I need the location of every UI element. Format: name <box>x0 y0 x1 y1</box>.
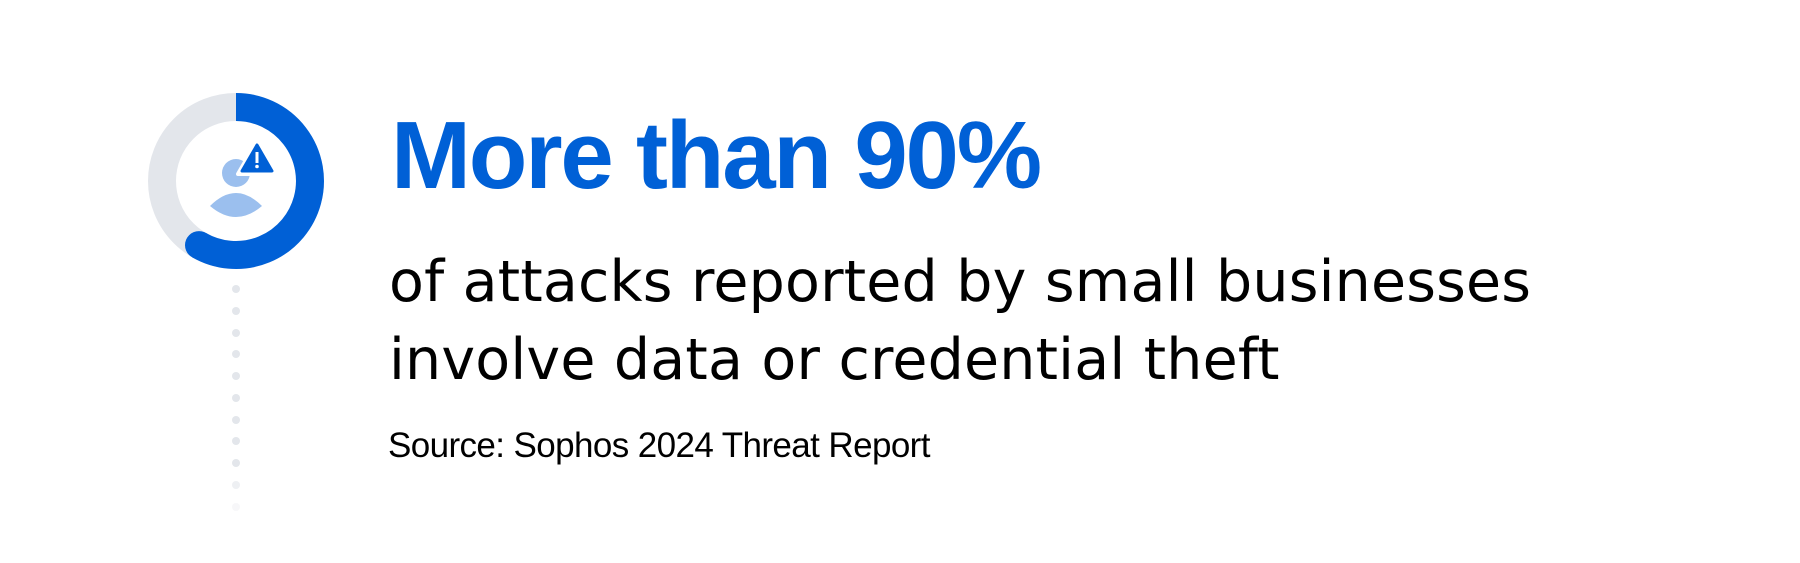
dotted timeline <box>232 285 240 511</box>
donut chart icon <box>148 93 324 489</box>
source: Source: Sophos 2024 Threat Report <box>388 426 930 465</box>
headline: More than 90% <box>391 102 1040 209</box>
icon: person with warning <box>210 141 276 217</box>
subtitle text: of attacks reported by small businesses <box>389 249 1531 315</box>
subtitle text <box>389 249 1531 393</box>
subtitle text: involve data or credential theft <box>389 327 1280 393</box>
donut ring <box>162 107 310 259</box>
